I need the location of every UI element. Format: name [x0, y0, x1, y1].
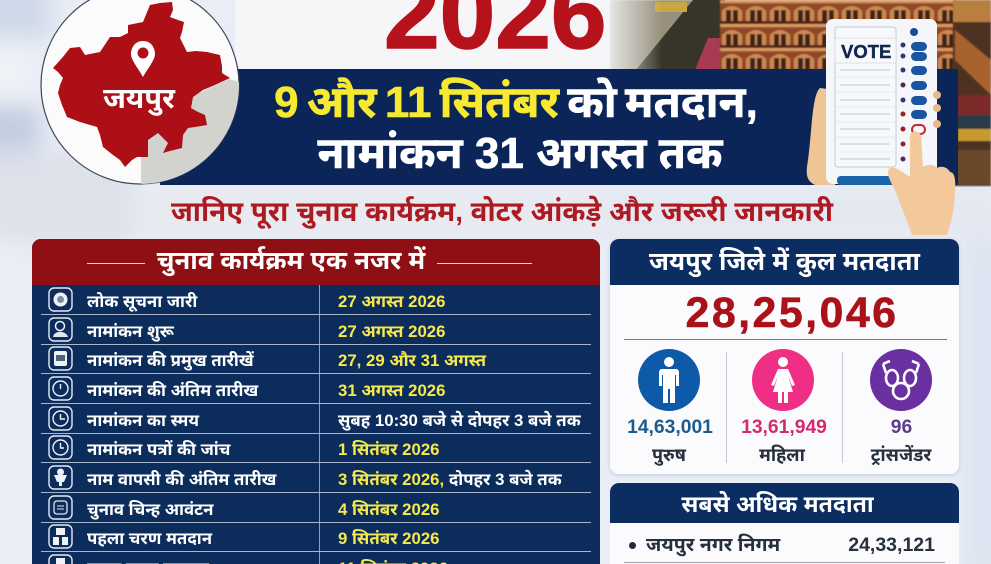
transgender label: ट्रांसजेंडर: [871, 445, 931, 465]
bullet: [629, 542, 636, 549]
voters heading: जयपुर जिले में कुल मतदाता: [649, 248, 920, 276]
municipal corporation count: 24,33,121: [848, 534, 935, 556]
row: last nomination date: [41, 376, 591, 404]
column divider: [319, 285, 320, 564]
row: first phase polling: पहला चरण मतदान: [87, 529, 212, 548]
female label: महिला: [759, 445, 805, 465]
right hand pressing button: [888, 132, 955, 235]
heading rule left: [87, 263, 145, 264]
row: key nomination dates: [41, 346, 591, 374]
map label: जयपुर: [103, 83, 176, 116]
row: nomination time: सुबह 10:30 बजे से दोपहर 3 बजे तक: [338, 411, 581, 430]
row: public notice: लोक सूचना जारी: [87, 292, 197, 311]
map of Rajasthan: [53, 2, 230, 167]
divider 1: [726, 352, 727, 463]
panel: highest voters: [610, 483, 959, 564]
icon: location pin: [131, 41, 155, 77]
voters heading: [610, 239, 959, 285]
transgender count: 96: [891, 417, 912, 438]
row: symbol allotment: 4 सितंबर 2026: [338, 500, 440, 519]
rule: [624, 339, 947, 340]
left hand: [807, 88, 835, 185]
photo: Hawa Mahal facade: [720, 0, 956, 70]
male label: पुरुष: [652, 445, 686, 465]
row: nomination start: 27 अगस्त 2026: [338, 322, 445, 341]
headline line 1: 9 और 11 सितंबर को मतदान,: [274, 78, 758, 127]
row: public notice: [41, 287, 591, 315]
stat: female voters: [741, 349, 827, 465]
row: symbol allotment: चुनाव चिन्ह आवंटन: [87, 500, 213, 519]
row: nomination start: [41, 317, 591, 345]
schedule heading: चुनाव कार्यक्रम एक नजर में: [157, 247, 425, 275]
icon: female: [752, 349, 814, 411]
VOTE label: VOTE: [841, 41, 891, 62]
row: scrutiny: नामांकन पत्रों की जांच: [87, 440, 230, 459]
row: symbol allotment: [41, 495, 591, 523]
row: withdrawal: 3 सितंबर 2026, दोपहर 3 बजे तक: [338, 470, 562, 489]
municipal corporation name: जयपुर नगर निगम: [646, 534, 780, 556]
female count: 13,61,949: [741, 417, 827, 438]
row: scrutiny: [41, 435, 591, 463]
machine body: [826, 19, 941, 185]
row: last nomination date: 31 अगस्त 2026: [338, 381, 445, 400]
row: nomination time: [41, 406, 591, 434]
EVM voting machine with hands: [806, 19, 956, 235]
row: last nomination date: नामांकन की अंतिम तारीख: [87, 381, 258, 400]
map badge: Jaipur: [40, 0, 240, 185]
headline line 2: नामांकन 31 अगस्त तक: [317, 129, 723, 178]
highest voters heading: [610, 483, 959, 523]
schedule heading: [32, 239, 600, 285]
row: withdrawal: [41, 465, 591, 493]
row: nomination start: नामांकन शुरू: [87, 322, 174, 341]
stat: male voters: [627, 349, 713, 466]
total voters number: 28,25,046: [686, 289, 898, 337]
stat: transgender voters: [870, 349, 932, 466]
row: second phase polling: [48, 554, 448, 564]
male count: 14,63,001: [627, 417, 713, 438]
row: key nomination dates: 27, 29 और 31 अगस्त: [338, 351, 486, 370]
row: scrutiny: 1 सितंबर 2026: [338, 440, 440, 459]
row: nomination time: नामांकन का स्मय: [87, 411, 199, 430]
highest voters heading: सबसे अधिक मतदाता: [681, 491, 874, 517]
photo: street: [600, 0, 725, 70]
row: key nomination dates: नामांकन की प्रमुख तारीखें: [87, 351, 254, 370]
subheading: जानिए पूरा चुनाव कार्यक्रम, वोटर आंकड़े और जरूरी जानकारी: [171, 196, 833, 227]
row: first phase polling: 9 सितंबर 2026: [338, 529, 440, 548]
panel: election schedule: [32, 239, 600, 564]
icon: transgender: [870, 349, 932, 411]
headline banner: [160, 69, 958, 185]
panel: total voters: [610, 239, 959, 474]
icon: male: [638, 349, 700, 411]
row: public notice: 27 अगस्त 2026: [338, 292, 445, 311]
row: first phase polling: [41, 524, 591, 552]
rule: [624, 562, 945, 563]
heading rule right: [437, 263, 532, 264]
divider 2: [842, 352, 843, 463]
photo: right side buildings: [953, 0, 991, 186]
row: withdrawal: नाम वापसी की अंतिम तारीख: [87, 470, 276, 489]
